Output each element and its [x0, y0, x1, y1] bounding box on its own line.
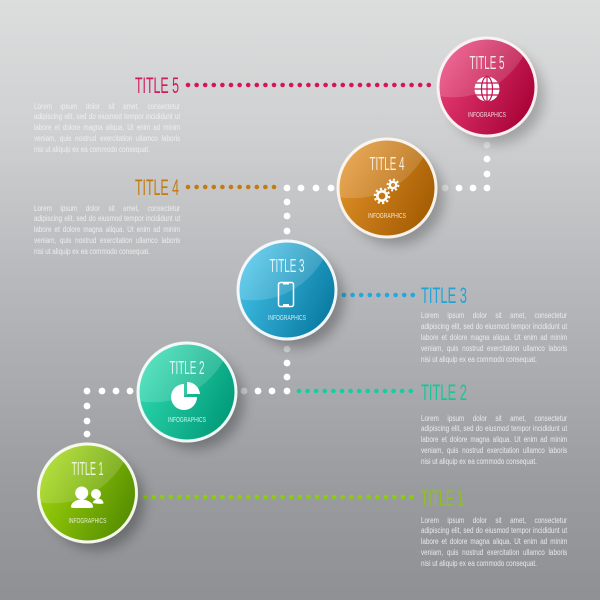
- connector: white dotted paths: [84, 142, 490, 437]
- circle 4: orange: [337, 137, 444, 245]
- text block: title 3 description: veniam, quis nostrud exercitation ullamco laboris: [421, 344, 567, 353]
- connector: title 5 line: [188, 83, 437, 87]
- text block: title 1 description: nisi ut aliquip ex ea commodo consequat.: [421, 559, 537, 568]
- connector: title 1 line: [145, 495, 413, 499]
- connector: title 4 line: [188, 185, 278, 189]
- circle 5: pink: INFOGRAPHICS: [468, 112, 506, 119]
- connector: title 3 line: [344, 293, 414, 297]
- text block: title 3 description: [421, 311, 568, 364]
- circle 5: pink: TITLE 5: [470, 53, 504, 73]
- heading: title 5: TITLE 5: [135, 73, 179, 98]
- circle 2: teal: INFOGRAPHICS: [168, 417, 206, 424]
- icon: people: [71, 486, 104, 508]
- circle 3: blue: [237, 239, 344, 347]
- text block: title 2 description: veniam, quis nostrud exercitation ullamco laboris: [421, 446, 567, 455]
- text block: title 4 description: [34, 204, 180, 256]
- heading: title 1: TITLE 1: [421, 486, 464, 511]
- heading: title 2: TITLE 2: [421, 380, 467, 405]
- text block: title 4 description: nisi ut aliquip ex ea commodo consequat.: [34, 247, 150, 256]
- text block: title 2 description: adipiscing elit, sed do eiusmod tempor incididunt ut: [421, 424, 567, 433]
- circle 5: pink: [437, 36, 544, 144]
- text block: title 5 description: veniam, quis nostrud exercitation ullamco laboris: [34, 134, 180, 143]
- circle 3: blue: INFOGRAPHICS: [268, 315, 306, 322]
- text block: title 1 description: [421, 516, 568, 568]
- text block: title 2 description: [421, 414, 568, 466]
- text block: title 3 description: adipiscing elit, sed do eiusmod tempor incididunt ut: [421, 322, 567, 331]
- text block: title 2 description: Lorem ipsum dolor sit amet, consectetur: [421, 414, 567, 422]
- text block: title 3 description: Lorem ipsum dolor sit amet, consectetur: [421, 311, 567, 320]
- text block: title 5 description: nisi ut aliquip ex ea commodo consequat.: [34, 145, 150, 154]
- text block: title 5 description: labore et dolore magna aliqua. Ut enim ad minim: [34, 123, 180, 132]
- text block: title 3 description: nisi ut aliquip ex ea commodo consequat.: [421, 355, 537, 364]
- icon: gears: [375, 180, 398, 203]
- circle 4: orange: INFOGRAPHICS: [368, 213, 406, 220]
- text block: title 2 description: labore et dolore magna aliqua. Ut enim ad minim: [421, 435, 567, 444]
- text block: title 4 description: adipiscing elit, sed do eiusmod tempor incididunt ut: [34, 214, 180, 223]
- text block: title 1 description: adipiscing elit, sed do eiusmod tempor incididunt ut: [421, 526, 567, 535]
- circle 2: teal: [137, 341, 244, 449]
- text block: title 1 description: Lorem ipsum dolor sit amet, consectetur: [421, 516, 567, 524]
- text block: title 4 description: labore et dolore magna aliqua. Ut enim ad minim: [34, 225, 180, 234]
- text block: title 1 description: labore et dolore magna aliqua. Ut enim ad minim: [421, 537, 567, 546]
- text block: title 1 description: veniam, quis nostrud exercitation ullamco laboris: [421, 548, 567, 557]
- icon: smartphone: [278, 282, 294, 306]
- circle 1: green: [38, 442, 145, 550]
- heading: title 4: TITLE 4: [135, 175, 179, 200]
- text block: title 5 description: [34, 102, 180, 154]
- connector: title 2 line: [299, 389, 412, 393]
- icon: pie chart: [171, 382, 200, 410]
- icon: globe: [474, 76, 500, 102]
- circle 1: green: TITLE 1: [72, 459, 104, 479]
- text block: title 3 description: labore et dolore magna aliqua. Ut enim ad minim: [421, 333, 567, 342]
- text block: title 5 description: adipiscing elit, sed do eiusmod tempor incididunt ut: [34, 112, 180, 121]
- text block: title 4 description: Lorem ipsum dolor sit amet, consectetur: [34, 204, 180, 212]
- heading: title 3: TITLE 3: [421, 283, 467, 308]
- circle 1: green: INFOGRAPHICS: [68, 518, 107, 525]
- circle 4: orange: TITLE 4: [370, 154, 404, 174]
- text block: title 5 description: Lorem ipsum dolor sit amet, consectetur: [34, 102, 180, 110]
- circle 2: teal: TITLE 2: [170, 358, 204, 378]
- text block: title 2 description: nisi ut aliquip ex ea commodo consequat.: [421, 457, 537, 466]
- text block: title 4 description: veniam, quis nostrud exercitation ullamco laboris: [34, 236, 180, 245]
- circle 3: blue: TITLE 3: [270, 256, 304, 276]
